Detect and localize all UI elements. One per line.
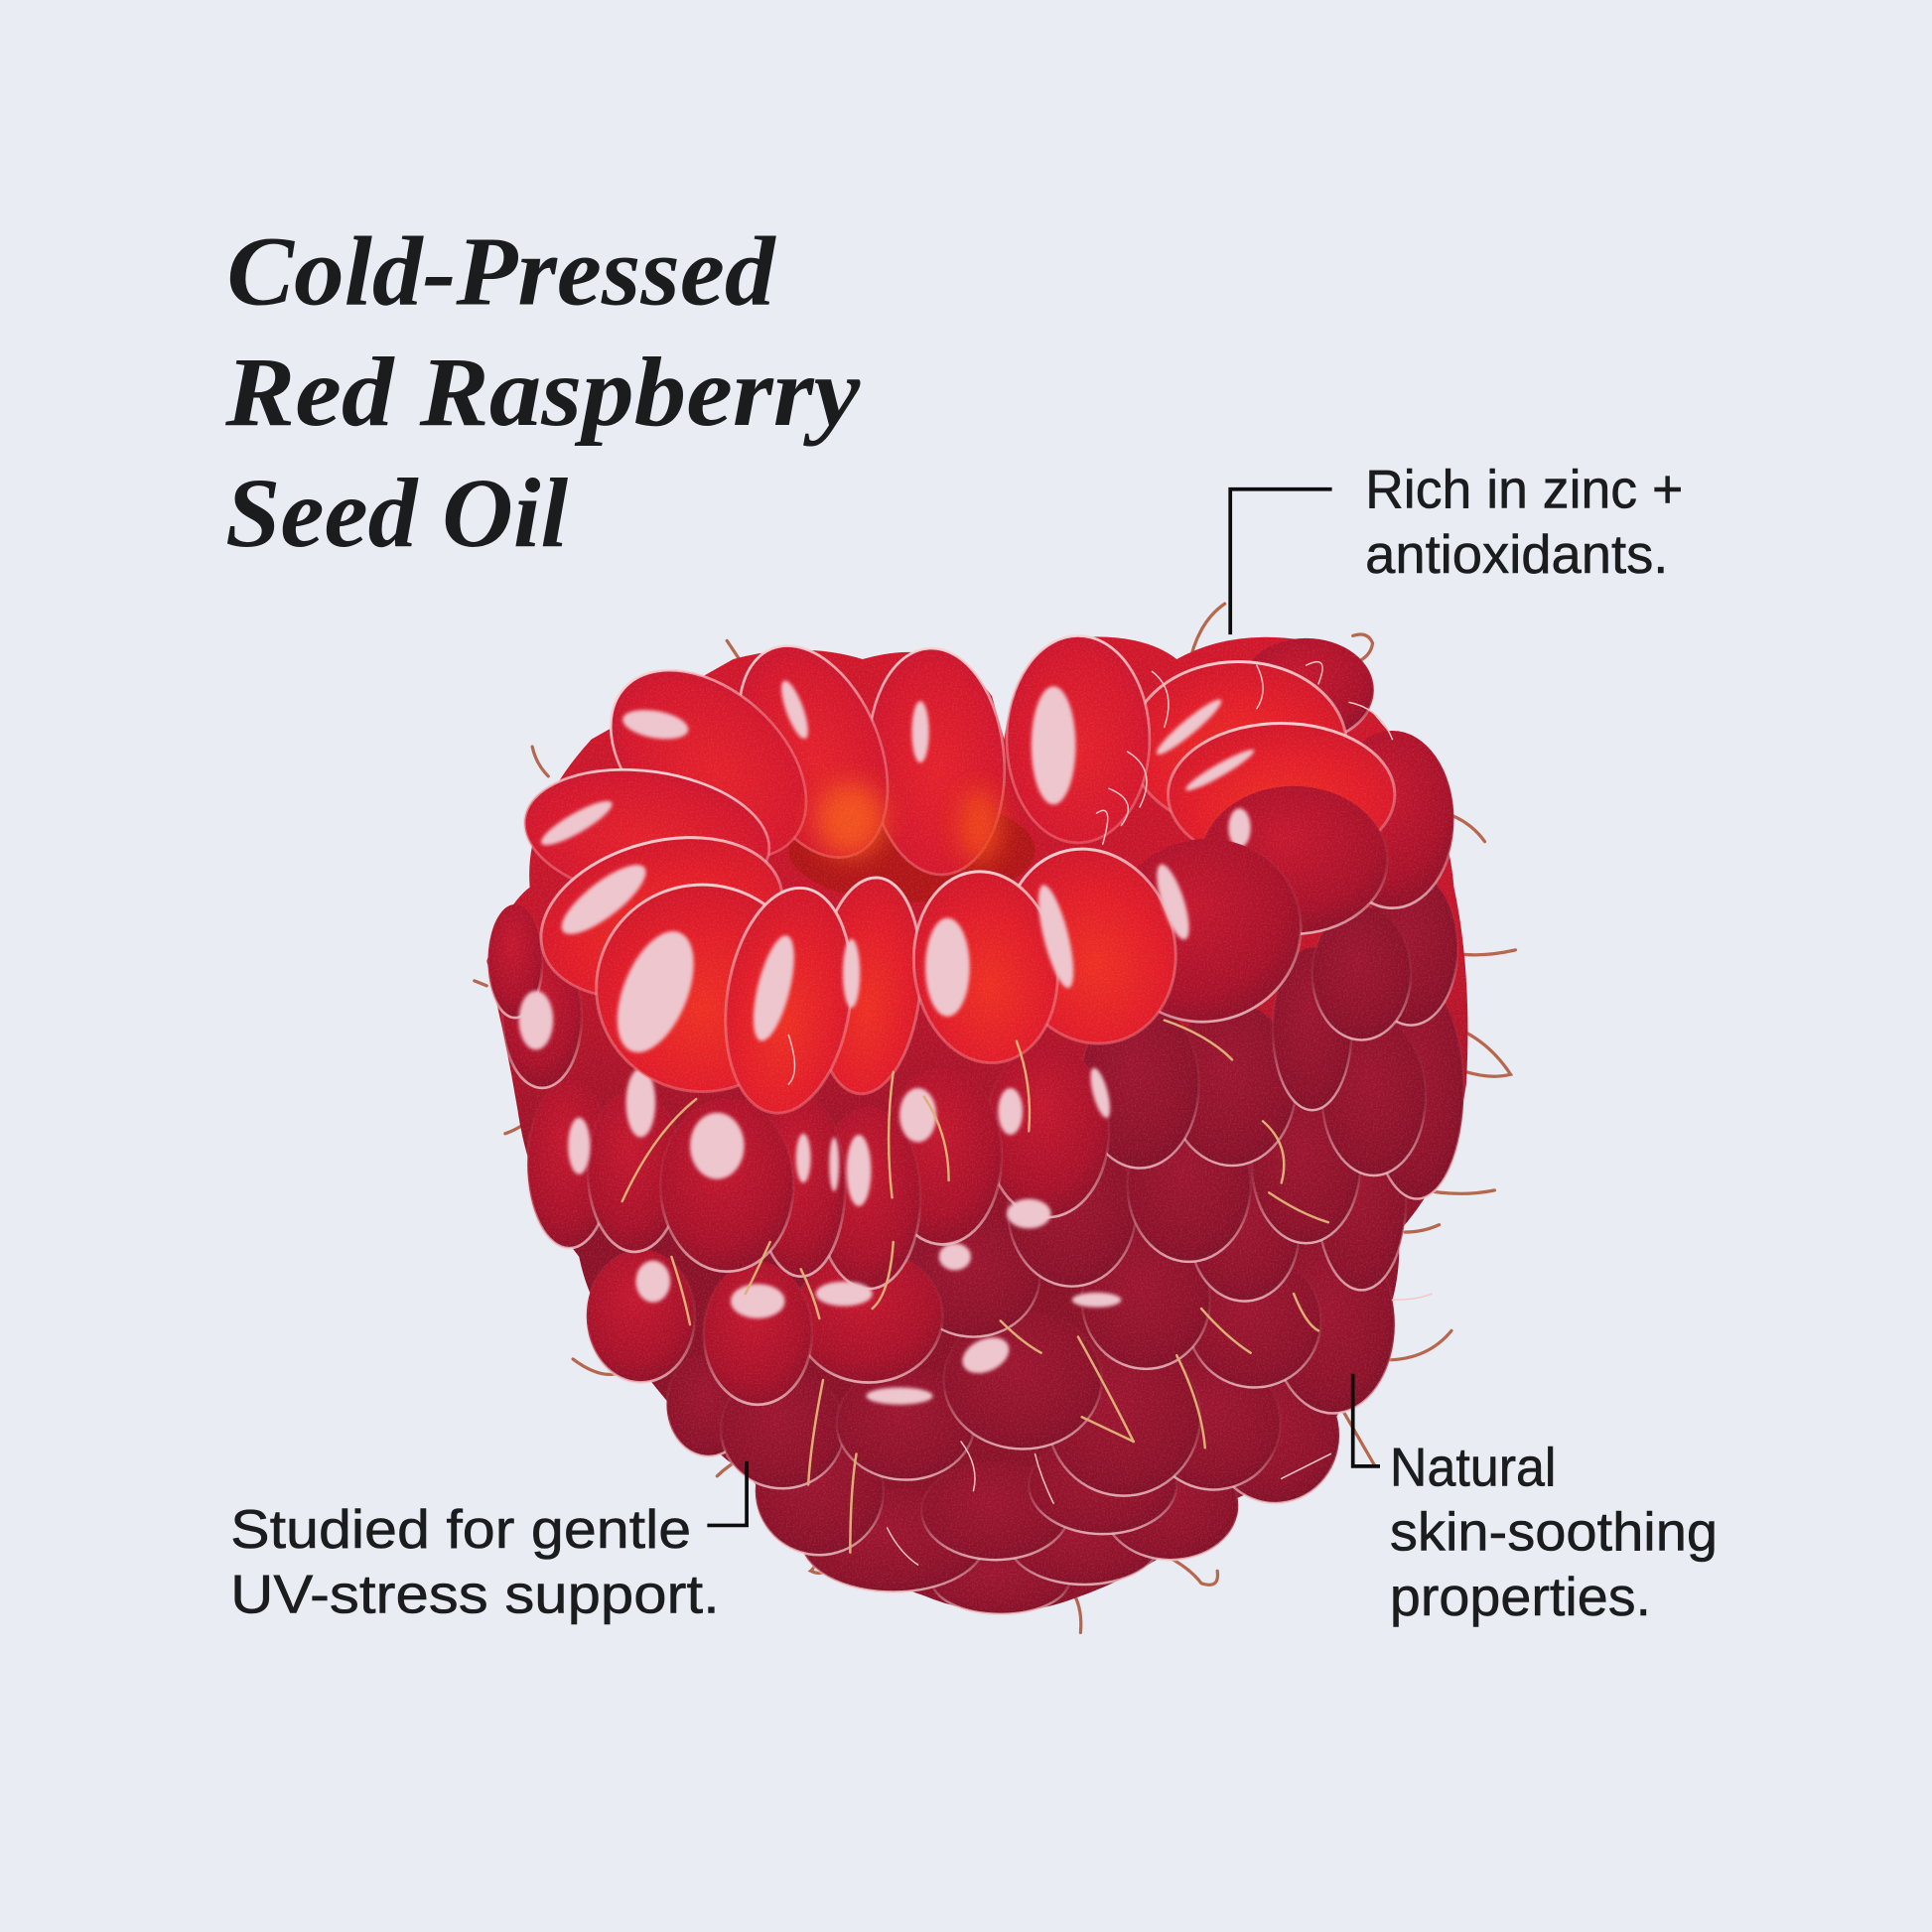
right segment highlights	[1153, 694, 1257, 848]
back ring highlights	[536, 678, 1075, 852]
outer curled hairs	[475, 604, 1516, 1632]
berry silhouette	[486, 636, 1467, 1612]
leader line: skin-soothing	[1353, 1374, 1380, 1466]
title: Seed Oil	[225, 460, 569, 568]
fine pale hairs	[788, 662, 1432, 1565]
round crimson segment	[1200, 786, 1387, 934]
pollen-white highlights on lower drupelets	[518, 991, 1121, 1405]
raspberry illustration	[475, 604, 1516, 1632]
callout text: zinc: antioxidants.	[1365, 524, 1668, 585]
central hollow	[788, 798, 1035, 901]
callout text: skin-soothing: skin-soothing	[1390, 1501, 1718, 1562]
title	[224, 218, 861, 568]
callout text: skin-soothing	[1390, 1438, 1718, 1627]
arcing segments	[1130, 661, 1395, 866]
front ring highlights	[552, 854, 1195, 1063]
right curled segments	[1130, 638, 1453, 934]
callout: skin-soothing	[1353, 1374, 1718, 1627]
callout text: skin-soothing: properties.	[1390, 1567, 1651, 1627]
callout text: UV-stress: UV-stress support.	[230, 1565, 720, 1625]
leader line: UV-stress	[707, 1461, 747, 1525]
front ring segments	[523, 812, 1321, 1121]
callout text: UV-stress	[230, 1499, 720, 1625]
tan surface hairs	[622, 1021, 1328, 1553]
callout: UV-stress	[230, 1461, 747, 1625]
title: Cold-Pressed	[226, 218, 776, 327]
mid berry drupelets	[487, 904, 1109, 1405]
callout text: zinc: Rich in zinc +	[1365, 459, 1683, 519]
callout text: skin-soothing: Natural	[1390, 1438, 1556, 1498]
callout text: zinc	[1365, 459, 1683, 585]
orange glow at inner rim	[816, 782, 1000, 863]
back right segment	[1238, 638, 1453, 908]
lower berry drupelets	[666, 873, 1463, 1614]
callout text: UV-stress: Studied for gentle	[230, 1499, 691, 1560]
back ring segments	[516, 623, 1150, 916]
leader line: zinc	[1230, 489, 1332, 634]
callout: zinc and antioxidants	[1230, 459, 1683, 634]
title: Red Raspberry	[224, 339, 861, 447]
